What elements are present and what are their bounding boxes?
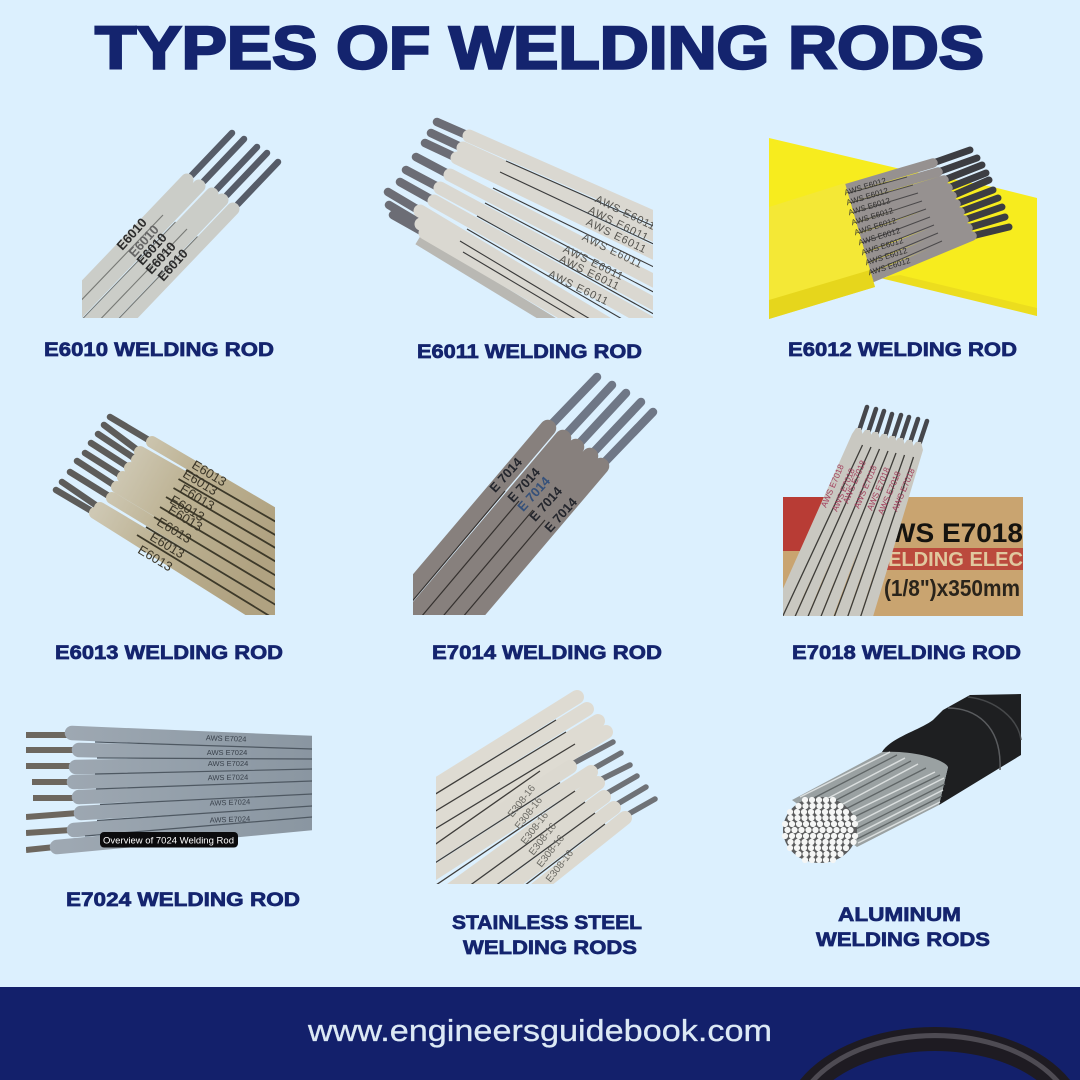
panel: E6012 rods on yellow box xyxy=(769,138,1037,319)
label: E6012: E6012 WELDING ROD xyxy=(788,339,1017,361)
rod markings: E6013 xyxy=(180,466,220,498)
label: E6013: E6013 WELDING ROD xyxy=(55,642,283,664)
rod markings xyxy=(489,458,577,532)
rod markings xyxy=(843,176,912,277)
rod markings: E6013 xyxy=(135,542,175,574)
black sleeve xyxy=(882,694,1021,805)
rod markings: E 7014 xyxy=(486,454,526,495)
icon: black ring xyxy=(800,1027,1070,1080)
panel: E7024 rods xyxy=(26,733,312,850)
caption badge: Overview of 7024 Welding Rod xyxy=(103,836,234,846)
rod markings: E 7014 xyxy=(541,494,581,535)
footer band xyxy=(0,987,1080,1080)
rod markings: AWS E7024 xyxy=(206,733,247,744)
rod markings: AWS E7018 xyxy=(865,465,892,512)
carton text: WS E7018 xyxy=(889,518,1023,548)
rod markings: AWS E7024 xyxy=(208,759,248,768)
rod markings: E6010 xyxy=(155,246,191,284)
panel: E6013 rods xyxy=(52,414,275,615)
rod markings: E 7014 xyxy=(514,473,554,514)
title: TYPES OF WELDING RODS xyxy=(95,14,984,82)
rod markings: AWS E6011 xyxy=(557,253,622,293)
rod markings: E308-16 xyxy=(519,810,551,847)
rod markings: E 7014 xyxy=(504,464,544,505)
label: E7018: E7018 WELDING ROD xyxy=(792,642,1021,664)
rod markings xyxy=(822,460,914,515)
rod markings: AWS E7018 xyxy=(819,462,846,509)
label: aluminum xyxy=(816,904,990,951)
label: E6011: E6011 WELDING ROD xyxy=(417,341,642,363)
rod markings: AWS E6012 xyxy=(850,206,895,227)
caption badge xyxy=(100,832,238,848)
panel: aluminum rods xyxy=(783,694,1021,863)
rod markings: AWS E7024 xyxy=(208,773,248,782)
label: stainless steel xyxy=(452,912,642,959)
rod markings: AWS E6012 xyxy=(864,246,909,267)
wire ends xyxy=(783,797,857,863)
rod markings: AWS E6012 xyxy=(853,216,898,237)
label: stainless steel: STAINLESS STEEL xyxy=(452,912,642,934)
carton xyxy=(783,497,1023,616)
rod markings: E6013 xyxy=(154,514,194,546)
rod markings: AWS E7018 xyxy=(841,458,868,505)
yellow box back xyxy=(769,138,1037,316)
label: E7024: E7024 WELDING ROD xyxy=(66,889,300,911)
rod markings: AWS E6012 xyxy=(845,186,890,207)
rod markings: E308-16 xyxy=(506,783,538,820)
rod markings: AWS E6012 xyxy=(860,236,905,257)
rod markings: AWS E6012 xyxy=(843,176,888,197)
rod markings: AWS E7024 xyxy=(209,814,250,825)
panel: E7014 rods xyxy=(413,372,658,615)
rod markings: AWS E6012 xyxy=(847,196,892,217)
rod markings: AWS E6012 xyxy=(857,226,902,247)
label: E6010: E6010 WELDING ROD xyxy=(44,339,274,361)
website url: www.engineersguidebook.com xyxy=(307,1013,772,1048)
rod markings: E308-16 xyxy=(535,833,567,870)
rod markings: AWS E6011 xyxy=(593,193,658,233)
rod markings: AWS E7018 xyxy=(830,466,857,513)
rod markings xyxy=(548,196,653,305)
wire bundle xyxy=(792,752,948,847)
rod markings: AWS E6012 xyxy=(867,256,912,277)
rod markings: E6010 xyxy=(134,230,170,268)
rod markings: AWS E7024 xyxy=(207,748,247,757)
rod markings: E6013 xyxy=(189,457,229,489)
label: E7014: E7014 WELDING ROD xyxy=(432,642,662,664)
panel: E7018 rods and box: (1/8")x350mm xyxy=(884,575,1020,601)
label: aluminum: ALUMINUM xyxy=(838,904,961,926)
rod markings: AWS E7018 xyxy=(876,469,903,516)
rod markings: AWS E6011 xyxy=(586,204,651,244)
rod markings: E6010 xyxy=(143,239,179,277)
rod markings xyxy=(508,785,573,882)
rod markings xyxy=(138,460,226,571)
rod markings: AWS E6011 xyxy=(584,216,649,256)
panel: stainless steel rods xyxy=(420,697,655,889)
rod markings: E6013 xyxy=(177,481,217,513)
rod markings: AWS E7024 xyxy=(209,797,250,808)
rod markings: E6013 xyxy=(165,502,205,534)
rod markings: E308-16 xyxy=(544,848,576,885)
rod markings: E6013 xyxy=(167,492,207,524)
rod markings: E308-16 xyxy=(513,795,545,832)
rod markings: E6010 xyxy=(126,222,162,260)
rod markings xyxy=(116,218,187,282)
panel: E7018 rods and box xyxy=(769,407,1023,620)
yellow sleeve front xyxy=(769,183,875,319)
label: stainless steel: WELDING RODS xyxy=(463,937,637,959)
panel: E7018 rods and box: ELDING ELEC xyxy=(888,549,1023,571)
rod markings: E6013 xyxy=(147,529,187,561)
rod markings: AWS E7018 xyxy=(852,463,879,510)
rod markings: AWS E6011 xyxy=(561,243,626,283)
panel: E6011 rods xyxy=(384,118,653,318)
panel: E6010 rods xyxy=(82,130,282,318)
label: aluminum: WELDING RODS xyxy=(816,929,990,951)
rod markings: AWS E6011 xyxy=(546,268,611,308)
rod markings: E6010 xyxy=(114,215,150,253)
rod markings xyxy=(206,733,250,825)
rod markings: E308-16 xyxy=(527,821,559,858)
rod markings: AWS E6011 xyxy=(580,231,645,271)
rod markings: E 7014 xyxy=(526,483,566,524)
rod markings: AWS E7018 xyxy=(890,466,917,513)
